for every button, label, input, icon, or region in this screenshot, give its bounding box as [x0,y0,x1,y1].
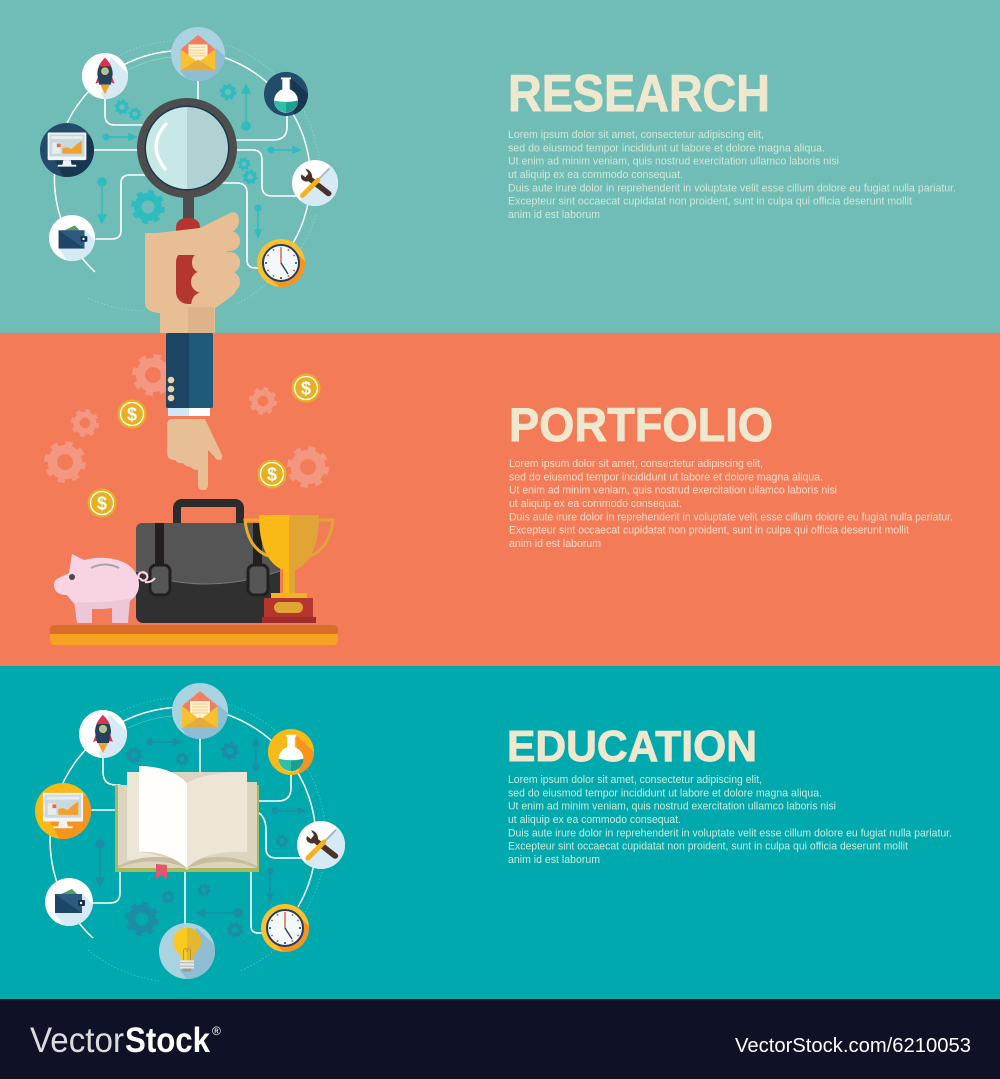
footer logo: Stock [125,1021,210,1060]
panel: education band [0,666,1000,999]
text block: portfolio body: Excepteur sint occaecat cupidatat non proident, sunt in culpa qui officia deserunt mollit [509,525,909,537]
icon: magnifying glass [137,98,237,222]
text block: portfolio body: Duis aute irure dolor in reprehenderit in voluptate velit esse cillum dolore eu fugiat nulla pariatur. [509,511,953,523]
portfolio background gears [47,357,326,485]
icon: light bulb [159,923,215,979]
footer image id: VectorStock.com/6210053 [735,1035,971,1057]
footer logo: ® [212,1024,221,1038]
title: portfolio: PORTFOLIO [509,398,773,451]
illustration: briefcase [136,503,280,623]
panel: research band [0,0,1000,333]
text block: education body: Excepteur sint occaecat cupidatat non proident, sunt in culpa qui officia deserunt mollit [508,841,908,853]
icon: flask [264,72,327,135]
footer logo [30,1021,221,1060]
education small gears [127,743,287,937]
research connector lines [94,80,297,268]
text block: education body: sed do eiusmod tempor incididunt ut labore et dolore magna aliqua. [508,787,822,799]
research small arrows [98,85,300,237]
text block: education body [508,774,952,866]
education connector lines [92,739,301,933]
illustration: hand holding magnifier [145,212,240,333]
text block: portfolio body: Ut enim ad minim veniam, quis nostrud exercitation ullamco laboris nisi [509,485,837,497]
icon: flask [268,729,334,795]
text block: education body: Duis aute irure dolor in reprehenderit in voluptate velit esse cillum dolore eu fugiat nulla pariatur. [508,827,952,839]
icon: monitor [35,783,121,869]
text block: research body [508,129,956,221]
icon: tools [297,821,366,890]
title: education: EDUCATION [507,722,757,771]
illustration: suit sleeve [166,333,213,416]
icon: dollar coins [88,374,320,518]
education diagram network rings [50,698,326,981]
text block: portfolio body [509,458,953,550]
text block: research body: anim id est laborum [508,209,600,221]
text block: portfolio body: sed do eiusmod tempor incididunt ut labore et dolore magna aliqua. [509,471,823,483]
icon: tools [292,160,358,226]
icon: clock [261,904,330,973]
text block: portfolio body: anim id est laborum [509,538,601,550]
title: research: RESEARCH [508,65,770,123]
illustration: shelf [50,625,338,645]
icon: envelope [171,27,249,105]
text block: education body: Ut enim ad minim veniam, quis nostrud exercitation ullamco laboris nisi [508,801,836,813]
illustration: piggy bank [54,554,155,623]
icon: rocket [82,53,143,114]
panel: portfolio band [0,333,1000,666]
icon: wallet [45,878,109,947]
icon: clock [257,239,326,308]
illustration: open book [115,766,259,879]
icon: envelope [172,683,253,764]
icon: rocket [79,710,143,774]
text block: research body: Lorem ipsum dolor sit amet, consectetur adipiscing elit, [508,129,764,141]
icon: wallet [49,215,110,281]
education small arrows [96,738,305,917]
illustration: pointing hand [167,419,222,490]
text block: education body: ut aliquip ex ea commodo consequat. [508,814,681,826]
text block: research body: Excepteur sint occaecat cupidatat non proident, sunt in culpa qui officia deserunt mollit [508,196,912,208]
panel: footer band [0,999,1000,1079]
research diagram network rings [54,41,320,311]
text block: portfolio body: ut aliquip ex ea commodo consequat. [509,498,682,510]
text block: research body: sed do eiusmod tempor incididunt ut labore et dolore magna aliqua. [508,142,825,154]
illustration: trophy [245,515,333,623]
text block: education body: Lorem ipsum dolor sit amet, consectetur adipiscing elit, [508,774,762,786]
text block: research body: ut aliquip ex ea commodo consequat. [508,169,683,181]
icon: monitor [40,123,123,206]
text block: portfolio body: Lorem ipsum dolor sit amet, consectetur adipiscing elit, [509,458,763,470]
text block: research body: Duis aute irure dolor in reprehenderit in voluptate velit esse cillum dolore eu fugiat nulla pariatur. [508,182,956,194]
footer logo: Vector [30,1021,124,1060]
text block: research body: Ut enim ad minim veniam, quis nostrud exercitation ullamco laboris nisi [508,156,839,168]
research small gears [116,85,256,221]
text block: education body: anim id est laborum [508,854,600,866]
